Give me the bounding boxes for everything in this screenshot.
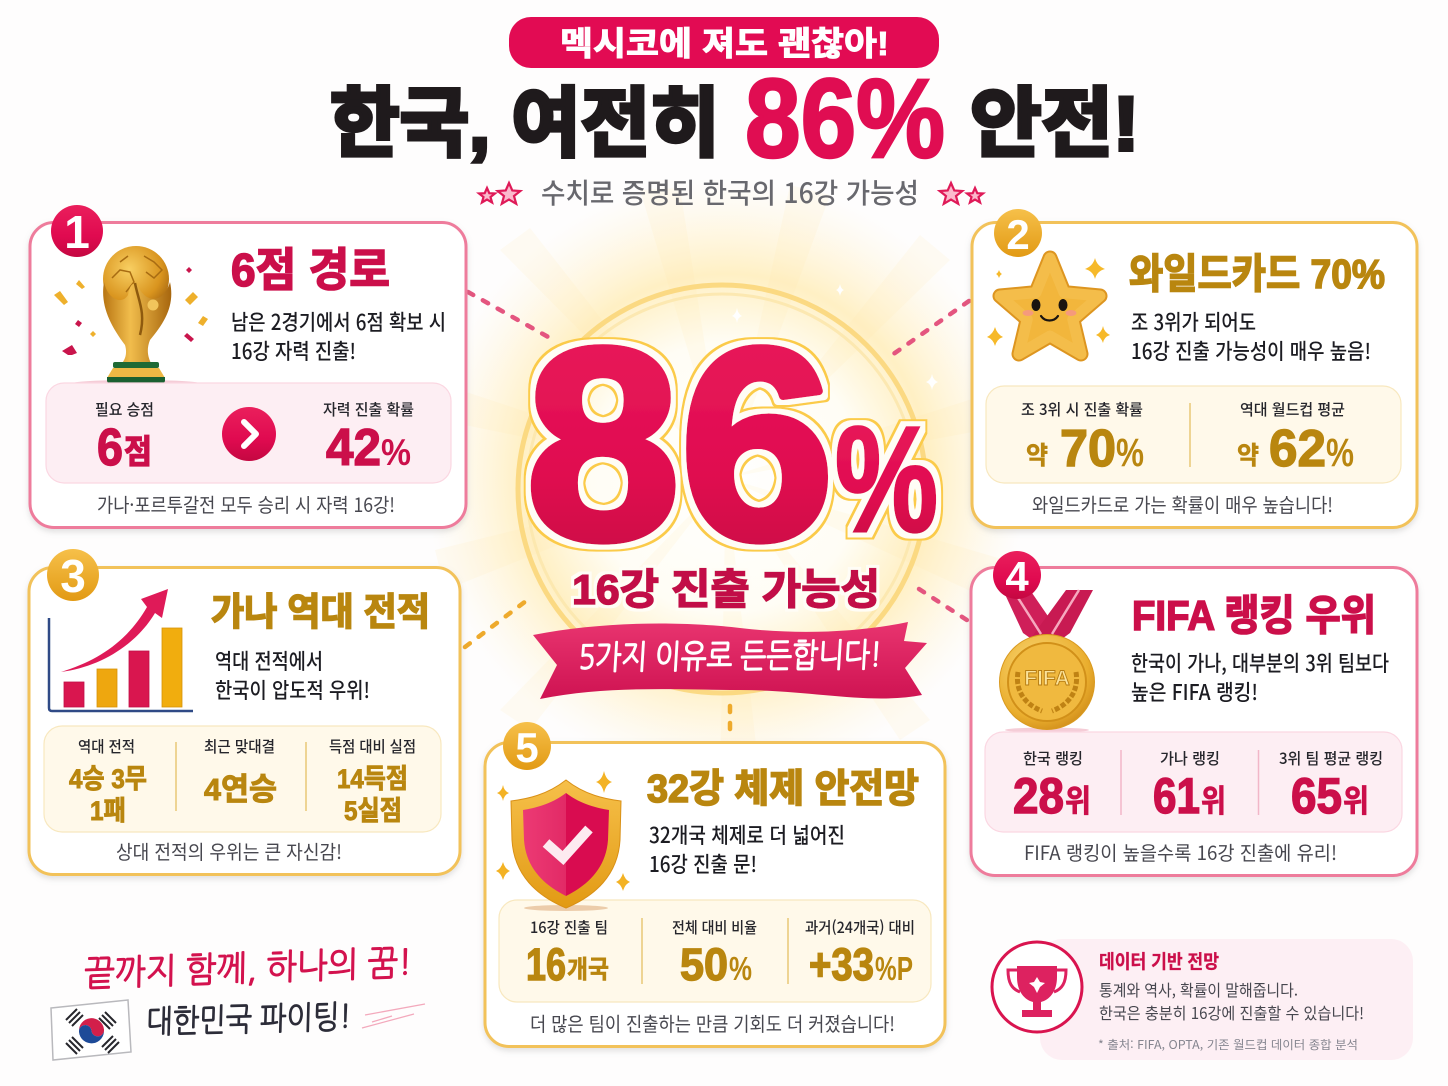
central big number 86%: %: [835, 395, 938, 563]
description: [231, 306, 446, 366]
main title: 한국, 여전히: [330, 82, 720, 167]
description: 16강 자력 진출!: [231, 335, 356, 366]
handwritten slogan: [84, 946, 425, 1038]
stat: 가나 랭킹: [1153, 747, 1226, 824]
heading: FIFA 랭킹 우위: [1132, 592, 1376, 639]
central big number 86%: 86: [526, 292, 834, 596]
stat: 역대 전적: 역대 전적: [78, 735, 135, 757]
handwritten slogan: 끝까지 함께, 하나의 꿈!: [84, 946, 412, 992]
ribbon banner: [533, 622, 927, 699]
number badge 1: [51, 205, 103, 258]
panel: card 5, 32강 체제 안전망: [485, 722, 945, 1046]
panel: card 4, FIFA 랭킹 우위: [971, 551, 1417, 876]
stat box: [499, 900, 931, 1002]
panel: card 1, 6점 경로: [30, 205, 466, 528]
description: 한국이 가나, 대부분의 3위 팀보다: [1131, 647, 1389, 678]
callout body: 통계와 역사, 확률이 말해줍니다.: [1099, 977, 1298, 1001]
description: 한국이 압도적 우위!: [215, 674, 370, 705]
icon: rising bar chart: [49, 589, 193, 711]
stat: 조 3위 시 진출 확률: [1021, 398, 1144, 478]
number badge 3: [47, 549, 99, 602]
stat: 전체 대비 비율: %: [729, 950, 752, 987]
handwritten slogan: 대한민국 파이팅!: [146, 1001, 352, 1038]
stat box: [44, 726, 441, 832]
stat: 16강 진출 팀: 개국: [567, 956, 609, 984]
footer note: FIFA 랭킹이 높을수록 16강 진출에 유리!: [1024, 837, 1337, 866]
central glow with rays: [426, 178, 1026, 780]
icon: world cup trophy with confetti: [54, 246, 208, 386]
description: 32개국 체제로 더 넓어진: [649, 819, 845, 850]
stat: 3위 팀 평균 랭킹: [1279, 747, 1383, 824]
stat: 득점 대비 실점: [329, 735, 416, 826]
stat: 득점 대비 실점: 득점 대비 실점: [329, 735, 416, 757]
stat: 가나 랭킹: 61: [1153, 768, 1200, 824]
dotted connector: card 1: [468, 292, 550, 338]
description: 16강 진출 가능성이 매우 높음!: [1131, 335, 1371, 366]
description: [649, 819, 845, 879]
description: 남은 2경기에서 6점 확보 시: [231, 306, 446, 337]
icon: FIFA gold medal: FIFA: [1024, 667, 1070, 690]
stat: 조 3위 시 진출 확률: 조 3위 시 진출 확률: [1021, 398, 1143, 420]
description: [1131, 306, 1371, 366]
subtitle with stars: 수치로 증명된 한국의 16강 가능성: [541, 172, 919, 212]
icon: FIFA gold medal: [1000, 590, 1094, 732]
heading: 6점 경로: [231, 244, 390, 296]
stat: 필요 승점: 점: [124, 433, 152, 470]
stat: 역대 월드컵 평균: [1237, 398, 1354, 478]
number badge 2: 2: [1006, 211, 1030, 258]
stat: 한국 랭킹: 한국 랭킹: [1023, 747, 1083, 769]
number badge 2: [994, 209, 1042, 258]
dotted connector: card 4: [919, 589, 970, 622]
heading: 32강 체제 안전망: [647, 768, 919, 811]
stat: 전체 대비 비율: 50: [680, 939, 728, 990]
panel: card 3, 가나 역대 전적: [29, 549, 460, 874]
footer note: 가나·포르투갈전 모두 승리 시 자력 16강!: [97, 489, 395, 518]
main title: [330, 56, 1139, 181]
number badge 5: [503, 722, 551, 771]
icon: shield with check: [496, 771, 630, 911]
description: 역대 전적에서: [215, 645, 323, 676]
stat: 역대 월드컵 평균: %: [1326, 431, 1354, 475]
stat: 전체 대비 비율: [672, 916, 757, 990]
dotted connector: card 3: [465, 598, 530, 647]
callout: data based forecast: [992, 939, 1413, 1060]
icon: arrow circle: [222, 407, 276, 461]
stat: 필요 승점: 필요 승점: [95, 398, 154, 420]
stat: 필요 승점: 6: [97, 419, 123, 477]
footer note: 와일드카드로 가는 확률이 매우 높습니다!: [1032, 489, 1333, 518]
icon: trophy circle: [992, 942, 1082, 1032]
number badge 5: 5: [515, 724, 539, 771]
stat: 한국 랭킹: 위: [1065, 784, 1091, 819]
stat: 최근 맞대결: 4연승: [204, 772, 277, 807]
stat: 역대 월드컵 평균: 62: [1269, 420, 1326, 478]
stat: 자력 진출 확률: [323, 398, 414, 477]
description: [215, 645, 370, 705]
footer note: 더 많은 팀이 진출하는 만큼 기회도 더 커졌습니다!: [530, 1008, 895, 1037]
stat: 역대 전적: 4승 3무: [69, 764, 147, 794]
description: 16강 진출 문!: [649, 848, 757, 879]
description: 높은 FIFA 랭킹!: [1131, 676, 1258, 707]
ribbon banner: 5가지 이유로 든든합니다!: [578, 638, 883, 674]
stat: 조 3위 시 진출 확률: 약: [1026, 442, 1048, 470]
callout body: 한국은 충분히 16강에 진출할 수 있습니다!: [1099, 1000, 1364, 1024]
stat: 최근 맞대결: [204, 735, 277, 807]
top pill banner: [509, 17, 939, 68]
dotted connector: card 5: [728, 706, 732, 735]
main title: 86%: [745, 56, 945, 181]
footer note: 상대 전적의 우위는 큰 자신감!: [116, 836, 342, 865]
stat: 16강 진출 팀: [526, 916, 609, 990]
top pill banner: 멕시코에 져도 괜찮아!: [560, 25, 889, 62]
stat: 3위 팀 평균 랭킹: 65: [1291, 768, 1342, 824]
heading: 와일드카드 70%: [1129, 251, 1385, 297]
number badge 4: [993, 551, 1041, 600]
icon: Korean flag: [51, 1000, 131, 1060]
stat: 최근 맞대결: 최근 맞대결: [204, 735, 275, 757]
stat: 16강 진출 팀: 16강 진출 팀: [530, 916, 608, 938]
stat: 역대 전적: [69, 735, 147, 826]
stat box: [46, 383, 451, 483]
stat: 과거(24개국) 대비: +33: [809, 939, 874, 990]
stat: 자력 진출 확률: %: [381, 432, 411, 473]
stat: 가나 랭킹: 가나 랭킹: [1160, 747, 1220, 769]
stat: 한국 랭킹: [1013, 747, 1091, 824]
number badge 4: 4: [1005, 553, 1029, 600]
dotted connector: card 2: [892, 301, 969, 355]
heading: 가나 역대 전적: [211, 592, 430, 634]
stat: 3위 팀 평균 랭킹: 3위 팀 평균 랭킹: [1279, 747, 1383, 769]
stat: 전체 대비 비율: 전체 대비 비율: [672, 916, 757, 938]
stat: 과거(24개국) 대비: [805, 916, 915, 990]
description: [1131, 647, 1389, 707]
stat: 한국 랭킹: 28: [1013, 768, 1064, 824]
stat: 역대 월드컵 평균: 역대 월드컵 평균: [1240, 398, 1345, 420]
icon: smiling star: [987, 258, 1110, 354]
panel: card 2, 와일드카드 70%: [972, 209, 1417, 528]
stat: 필요 승점: [95, 398, 154, 477]
number badge 3: 3: [60, 550, 86, 602]
stat: 3위 팀 평균 랭킹: 위: [1343, 784, 1369, 819]
stat: 역대 월드컵 평균: 약: [1237, 442, 1259, 470]
stat box: [986, 386, 1401, 483]
source note: * 출처: FIFA, OPTA, 기존 월드컵 데이터 종합 분석: [1098, 1036, 1358, 1053]
stat: 조 3위 시 진출 확률: %: [1116, 431, 1144, 475]
stat: 16강 진출 팀: 16: [526, 939, 566, 990]
description: 조 3위가 되어도: [1131, 306, 1256, 337]
central caption: 16강 진출 가능성: [572, 566, 880, 613]
stat: 득점 대비 실점: 5실점: [344, 796, 402, 826]
stat: 과거(24개국) 대비: %P: [875, 950, 913, 987]
stat: 득점 대비 실점: 14득점: [337, 764, 408, 794]
stat: 조 3위 시 진출 확률: 70: [1060, 420, 1116, 478]
stat box: [985, 732, 1402, 832]
stat: 자력 진출 확률: 자력 진출 확률: [323, 398, 414, 420]
stat: 자력 진출 확률: 42: [326, 419, 381, 477]
stat: 가나 랭킹: 위: [1201, 784, 1226, 819]
main title: 안전!: [970, 82, 1139, 167]
callout heading: 데이터 기반 전망: [1099, 951, 1219, 973]
number badge 1: 1: [64, 206, 90, 258]
stat: 역대 전적: 1패: [90, 796, 126, 826]
stat: 과거(24개국) 대비: 과거(24개국) 대비: [805, 916, 915, 938]
callout body: [1099, 977, 1364, 1024]
